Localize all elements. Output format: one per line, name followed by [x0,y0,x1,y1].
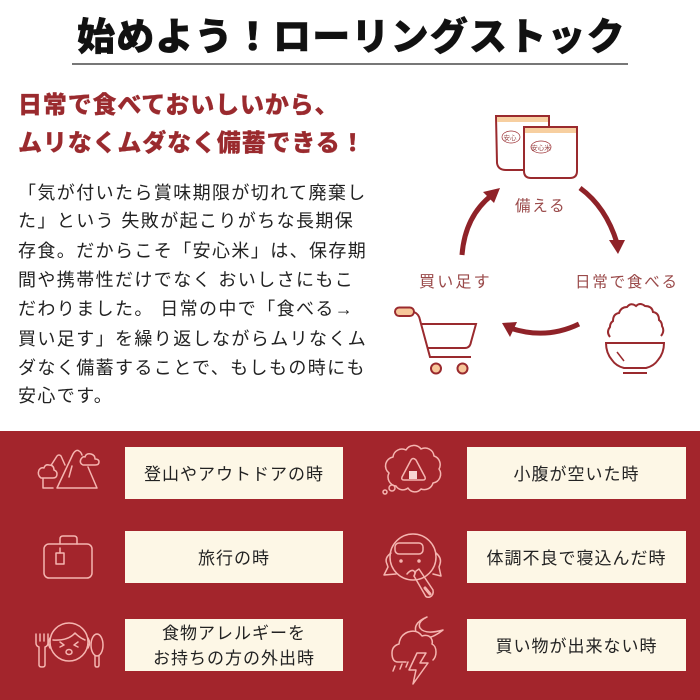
icon: thought bubble with rice ball [383,445,441,494]
box: cannot shop [467,619,686,671]
box: hungry [467,447,686,499]
icon: crying child with cutlery [36,623,103,667]
title: 始めよう！ローリングストック [77,17,626,59]
body text: 買い足す」を繰り返しながらムリなくム [18,329,367,349]
icon: pouches [496,116,577,178]
icon: rice bowl [606,304,664,373]
box: sick: 体調不良で寝込んだ時 [486,548,666,568]
icon: sick person with thermometer [384,534,441,597]
box: mountains [125,447,343,499]
title underline [72,63,628,65]
icon: pouches: 安心 [504,133,517,142]
body text [18,183,367,406]
icon: pouches: 安心米 [531,143,551,152]
body text: 間や携帯性だけでなく おいしさにもこ [18,270,354,290]
cycle diagram [394,115,665,374]
body text: 存食。だからこそ「安心米」は、保存期 [18,241,367,261]
icon: shopping cart [395,308,476,374]
heading text: ムリなくムダなく備蓄できる！ [18,130,365,157]
heading text [18,92,365,157]
arrow: buy to prepare [462,188,500,255]
box: cannot shop: 買い物が出来ない時 [496,636,658,656]
box: mountains: 登山やアウトドアの時 [144,464,324,484]
cycle label: prepare: 備える [515,198,566,215]
body text: 「気が付いたら賞味期限が切れて廃棄し [18,183,367,203]
cycle label: eat daily: 日常で食べる [575,274,679,291]
icon: suitcase [44,536,92,578]
arrow: prepare to eat [580,188,625,254]
icon: storm cloud and moon [392,617,443,684]
red band [0,431,700,700]
body text: だわりました。 日常の中で「食べる→ [18,299,354,319]
box: hungry: 小腹が空いた時 [514,464,640,484]
box: allergy: 食物アレルギーを [162,624,306,643]
icon: mountains [38,450,99,488]
box: travel: 旅行の時 [198,548,270,568]
body text: た」という 失敗が起こりがちな長期保 [18,211,354,231]
box: sick [467,531,686,583]
box: allergy [125,619,343,671]
cycle label: buy more: 買い足す [419,274,492,291]
box: allergy: お持ちの方の外出時 [153,649,315,668]
box: travel [125,531,343,583]
heading text: 日常で食べておいしいから、 [18,92,339,119]
body text: ダなく備蓄することで、もしもの時にも [18,358,366,378]
arrow: eat to buy [502,322,579,337]
body text: 安心です。 [18,386,113,406]
